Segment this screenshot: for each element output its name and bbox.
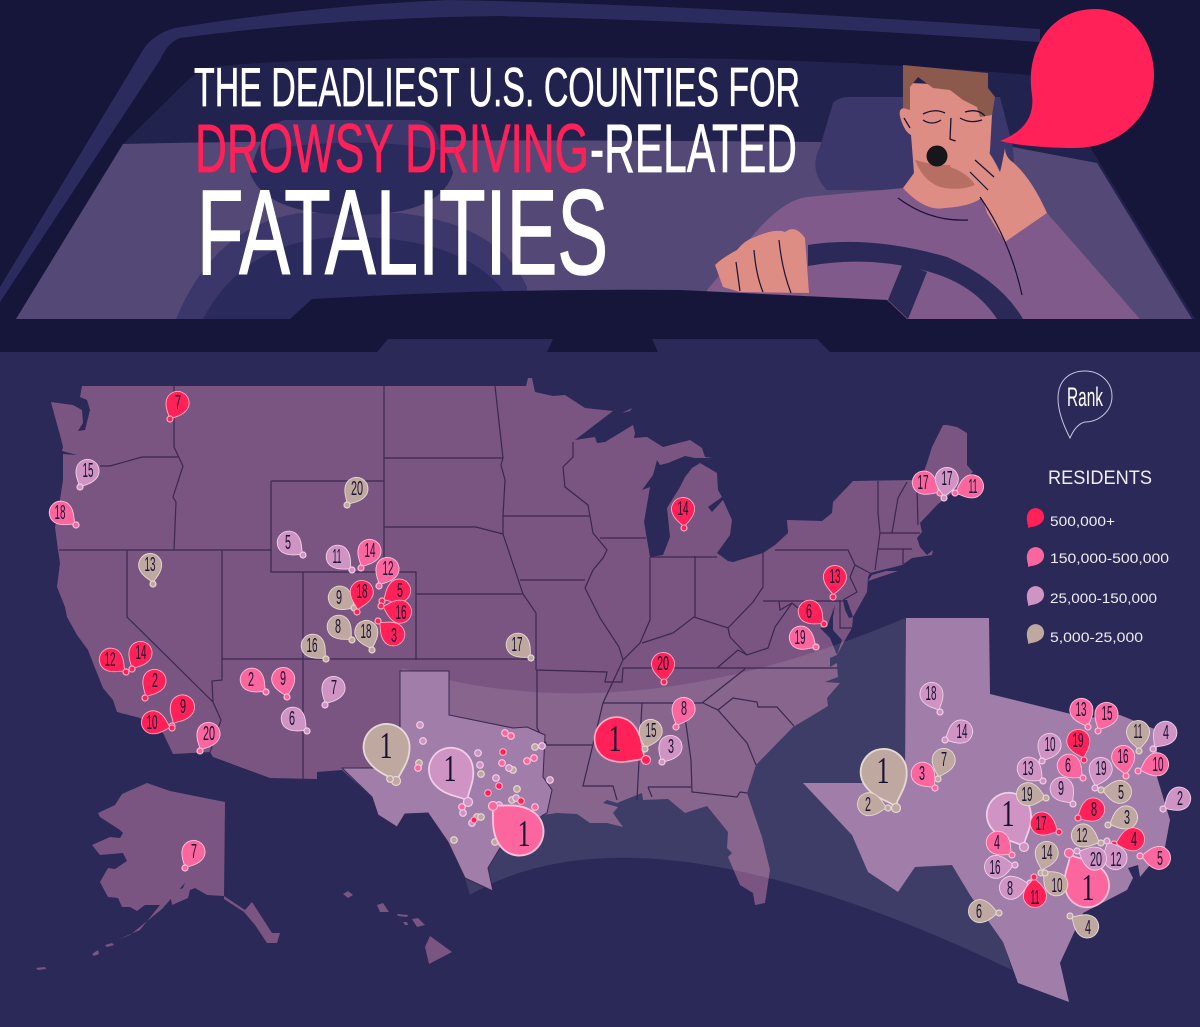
pin rank 10 — [1035, 863, 1073, 901]
pin rank 5 — [1137, 845, 1172, 871]
illustration: yawning driver — [290, 65, 1140, 319]
red speech bubble — [1000, 9, 1154, 148]
pin rank 1 tan: 1 — [876, 750, 890, 792]
title: THE DEADLIEST U.S. COUNTIES FOR — [194, 56, 800, 118]
pin rank 16: 16 — [990, 857, 1000, 879]
pin rank 13 — [137, 552, 164, 587]
pin rank 17: 17 — [1036, 813, 1046, 835]
pin rank 1 mauve — [421, 740, 487, 811]
pin rank 14: 14 — [678, 498, 688, 520]
pin rank 19 — [1084, 755, 1115, 791]
pin rank 5 — [1098, 779, 1133, 805]
title — [194, 56, 800, 300]
pin rank 6 — [1053, 749, 1090, 787]
pin rank 12 — [1068, 820, 1104, 853]
pin rank 11 — [951, 472, 987, 504]
pin rank 1 tan — [358, 718, 419, 789]
pin rank 7 Alaska — [175, 836, 209, 874]
pin rank 14 — [1031, 839, 1061, 876]
title: -RELATED — [590, 110, 797, 187]
pin rank 10: 10 — [1152, 754, 1164, 776]
pin rank 6 — [967, 898, 1002, 924]
pin rank 9 — [1046, 773, 1082, 811]
pin rank 20: 20 — [1090, 849, 1102, 871]
pin rank 7 — [159, 388, 193, 425]
pin rank 7 Alaska: 7 — [191, 841, 197, 863]
pin rank 9 — [163, 691, 199, 730]
pin rank 2 — [135, 665, 170, 703]
pin rank 1 tan: 1 — [380, 725, 392, 767]
pin rank 10 — [1031, 730, 1065, 767]
legend item 500,000+ — [1021, 505, 1115, 533]
pin rank 2 — [1157, 783, 1195, 818]
pin rank 1 pink — [475, 787, 553, 865]
pin rank 5: 5 — [1118, 782, 1124, 804]
pin rank 6 — [794, 595, 831, 633]
pin rank 1 mauve: 1 — [1002, 793, 1014, 835]
pin rank 12: 12 — [1076, 825, 1088, 847]
pin rank 20 — [1074, 841, 1110, 874]
pin rank 19 — [785, 622, 823, 657]
islands: Long Island and Isle Royale — [622, 408, 898, 581]
pin rank 4: 4 — [1085, 917, 1091, 939]
state borders — [59, 386, 920, 800]
pin rank 19: 19 — [1072, 730, 1084, 752]
driver closed eyes and brows — [904, 111, 985, 142]
header: car interior illustration — [0, 0, 1200, 352]
pin rank 11 — [1126, 720, 1151, 754]
pin rank 15 — [69, 456, 103, 493]
pins: enlarged Texas inset — [854, 679, 1195, 942]
pin rank 4: 4 — [1131, 829, 1137, 851]
map: Alaska — [92, 783, 280, 943]
pin rank 4 — [1111, 825, 1147, 855]
pin rank 2 — [856, 791, 891, 819]
legend item 25,000-150,000 — [1021, 583, 1157, 611]
pin rank 14: 14 — [1042, 842, 1052, 864]
driver neck and face — [900, 83, 992, 209]
pin rank 18: 18 — [356, 581, 368, 603]
pin rank 16: 16 — [396, 602, 406, 624]
pin rank 10: 10 — [1044, 734, 1056, 756]
legend item 500,000+: 500,000+ — [1050, 514, 1115, 529]
pin rank 11: 11 — [968, 476, 978, 498]
pin rank 14: 14 — [136, 642, 146, 664]
pin rank 11: 11 — [1030, 887, 1040, 909]
title: FATALITIES — [197, 164, 608, 300]
pin rank 15 — [634, 716, 665, 752]
pin rank 19: 19 — [794, 627, 806, 649]
lakes and bays — [642, 456, 853, 655]
pin rank 17: 17 — [512, 634, 522, 656]
pin rank 17: 17 — [918, 472, 928, 494]
pin rank 16 — [296, 629, 334, 667]
pin rank 20: 20 — [351, 478, 363, 500]
pin rank 5: 5 — [285, 532, 291, 554]
title: DROWSY DRIVING — [195, 110, 589, 187]
legend item 5,000-25,000: 5,000-25,000 — [1050, 630, 1143, 645]
pin rank 16: 16 — [1118, 746, 1128, 768]
pin rank 2 — [236, 663, 273, 701]
pin rank 7: 7 — [175, 392, 181, 414]
pin rank 14 — [122, 637, 156, 675]
pin rank 2: 2 — [152, 670, 158, 692]
pin rank 19 — [1064, 727, 1095, 763]
rank bubble: Rank — [1067, 382, 1103, 412]
map: Hawaii — [343, 891, 452, 964]
driver raised hand — [950, 138, 1047, 242]
pin rank 4 — [1065, 907, 1103, 942]
pin rank 1 red: 1 — [608, 718, 622, 760]
pin rank 1 pink — [1051, 844, 1117, 915]
steering wheel — [808, 242, 1023, 319]
pin rank 15: 15 — [82, 460, 94, 482]
pin rank 20: 20 — [657, 653, 669, 675]
pin rank 4 — [982, 826, 1019, 864]
pin rank 7 — [315, 672, 349, 710]
pin rank 7: 7 — [331, 677, 337, 699]
pin rank 17: 17 — [942, 468, 952, 490]
pin rank 18 — [45, 496, 82, 533]
pin rank 1 tan — [854, 743, 917, 814]
legend item 150,000-500,000: 150,000-500,000 — [1050, 551, 1169, 566]
pin rank 13: 13 — [1022, 758, 1034, 780]
pin rank 12: 12 — [382, 558, 394, 580]
pin rank 20 — [651, 652, 676, 685]
pin rank 12 — [95, 643, 132, 680]
pin rank 4 — [1145, 717, 1181, 755]
pin rank 8 — [666, 694, 699, 730]
pin rank 15: 15 — [646, 720, 656, 742]
pin rank 1 mauve — [980, 786, 1044, 856]
magnifying beam from Texas — [402, 618, 1012, 970]
pin rank 10 — [139, 708, 175, 739]
pin rank 14 — [351, 535, 385, 573]
pin rank 11: 11 — [1134, 721, 1142, 743]
pin rank 19 — [1014, 781, 1049, 809]
pin rank 2: 2 — [1177, 788, 1183, 810]
pin rank 13: 13 — [1076, 699, 1086, 721]
pin rank 16 — [983, 854, 1018, 880]
map: highlighted Texas — [342, 671, 552, 891]
pin rank 6: 6 — [1065, 755, 1071, 777]
pin rank 5 — [377, 575, 415, 610]
pin rank 20: 20 — [203, 723, 215, 745]
pin rank 2: 2 — [865, 794, 871, 816]
pin rank 16 — [378, 595, 414, 626]
pin rank 3: 3 — [391, 625, 397, 647]
pin rank 8: 8 — [335, 616, 341, 638]
pin rank 20 — [337, 473, 372, 511]
pin rank 5: 5 — [397, 580, 403, 602]
driver open mouth — [926, 146, 948, 166]
pin rank 3 — [372, 613, 409, 651]
pin rank 18 — [352, 617, 383, 653]
driver hair — [903, 65, 995, 117]
pin rank 6: 6 — [289, 708, 295, 730]
legend item 150,000-500,000 — [1021, 544, 1169, 572]
residents heading: RESIDENTS — [1048, 468, 1152, 489]
pin rank 14 — [939, 716, 977, 750]
pins: western and national map — [45, 388, 987, 874]
pin rank 14: 14 — [956, 721, 968, 743]
pin rank 17 — [1026, 808, 1064, 842]
pin rank 16: 16 — [306, 635, 318, 657]
pin rank 12: 12 — [104, 649, 116, 671]
map: Aleutian islands — [36, 943, 114, 970]
pin rank 19: 19 — [1096, 758, 1106, 780]
pin rank 15: 15 — [1102, 703, 1112, 725]
pin rank 9: 9 — [280, 668, 286, 690]
pin rank 7: 7 — [941, 749, 947, 771]
map: contiguous United States — [51, 378, 973, 905]
pin rank 5 — [273, 526, 310, 564]
legend item 25,000-150,000: 25,000-150,000 — [1050, 591, 1157, 606]
pin rank 6: 6 — [976, 901, 982, 923]
pin rank 1 red — [586, 708, 658, 777]
legend — [1021, 371, 1169, 649]
driver shirt — [707, 188, 1140, 319]
pin rank 6 — [277, 702, 314, 740]
pin rank 4: 4 — [1163, 722, 1169, 744]
pin rank 18 — [346, 578, 376, 615]
pin rank 8: 8 — [1091, 799, 1097, 821]
pin rank 6: 6 — [806, 601, 812, 623]
pin rank 3: 3 — [919, 763, 925, 785]
pin rank 5: 5 — [1157, 848, 1163, 870]
pin rank 17 — [501, 628, 539, 666]
pin rank 11 — [1022, 874, 1047, 909]
pin rank 9: 9 — [336, 587, 342, 609]
pin rank 17 — [933, 466, 960, 501]
pin rank 7 — [927, 746, 958, 782]
pin rank 3 — [1105, 802, 1141, 835]
pin rank 12 — [1097, 836, 1131, 874]
pin rank 9: 9 — [1058, 778, 1064, 800]
icon: driver headrest — [815, 97, 1015, 190]
pin rank 1 pink: 1 — [1082, 867, 1094, 909]
pin rank 11 — [321, 540, 359, 578]
pin rank 9 — [270, 665, 298, 700]
pin rank 16 — [1110, 744, 1137, 779]
pin rank 8 — [997, 872, 1033, 902]
pin rank 12: 12 — [1110, 849, 1122, 871]
pin rank 9: 9 — [180, 696, 186, 718]
pin rank 12 — [369, 553, 403, 591]
pin rank 13: 13 — [830, 566, 840, 588]
rank bubble — [1058, 371, 1112, 438]
small county dots in Texas — [415, 722, 553, 845]
pin rank 3: 3 — [668, 736, 674, 758]
pin rank 17 — [908, 467, 946, 502]
map: enlarged Texas inset — [803, 618, 1170, 1002]
pin rank 10 — [1135, 750, 1172, 781]
pin rank 8: 8 — [1007, 878, 1013, 900]
pin rank 1 pink: 1 — [518, 813, 530, 855]
driver hand on wheel — [715, 229, 809, 293]
pin rank 18: 18 — [54, 502, 66, 524]
pin rank 18: 18 — [360, 621, 372, 643]
pin rank 14: 14 — [364, 540, 376, 562]
pin rank 10: 10 — [146, 712, 158, 734]
pin rank 18 — [916, 679, 950, 716]
legend item 5,000-25,000 — [1021, 621, 1143, 649]
pin rank 9 — [324, 582, 362, 618]
pin rank 15 — [1088, 698, 1122, 736]
pin rank 13 — [1067, 695, 1099, 731]
pin rank 11: 11 — [332, 546, 342, 568]
pin rank 13: 13 — [144, 554, 156, 576]
pin rank 20 — [190, 718, 224, 756]
pin rank 4: 4 — [994, 832, 1000, 854]
dashboard — [290, 290, 907, 319]
pin rank 3: 3 — [1124, 807, 1130, 829]
pin rank 1 mauve: 1 — [444, 748, 456, 790]
pin rank 3 — [906, 758, 944, 795]
pin rank 8: 8 — [681, 698, 687, 720]
pin rank 18: 18 — [926, 683, 936, 705]
pin rank 14 — [671, 497, 696, 531]
pin rank 3 — [651, 731, 686, 769]
pin rank 8 — [322, 610, 360, 648]
driver beard — [915, 160, 985, 189]
pin rank 2: 2 — [248, 669, 254, 691]
pin rank 10: 10 — [1052, 875, 1062, 897]
pin rank 13 — [822, 565, 847, 600]
pin rank 8 — [1071, 794, 1109, 829]
pin rank 19: 19 — [1022, 784, 1032, 806]
pin rank 13 — [1013, 752, 1050, 790]
